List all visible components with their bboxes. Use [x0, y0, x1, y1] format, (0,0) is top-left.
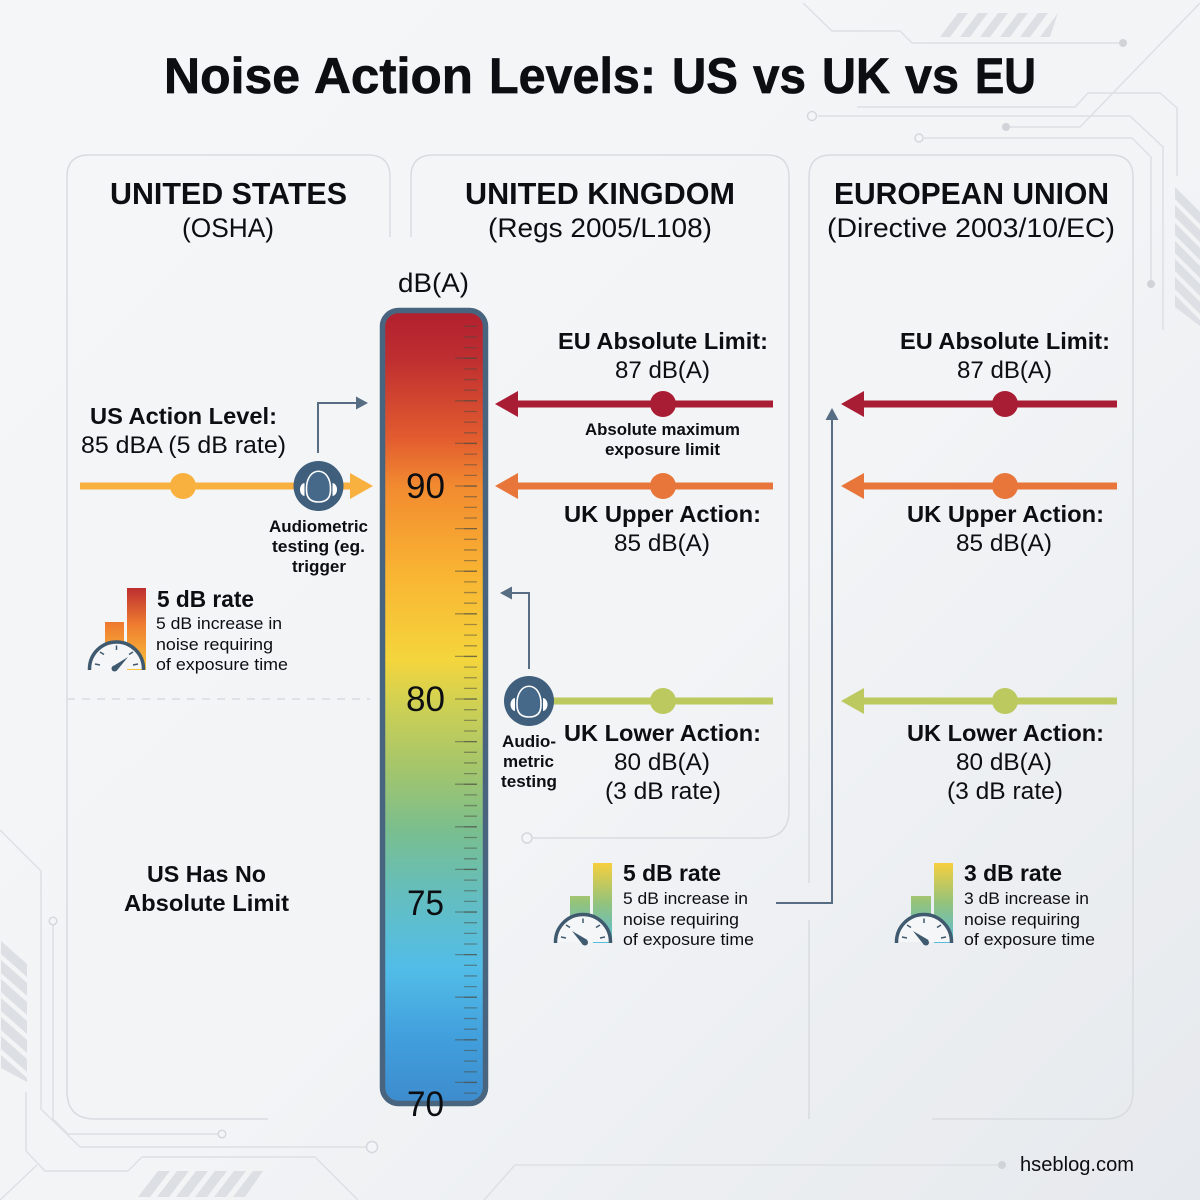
UK rate text: 5 dB rate — [623, 860, 721, 886]
heading: United Kingdom: UNITED KINGDOM — [465, 176, 735, 211]
EU upper action label — [907, 501, 1104, 557]
arrow: UK column absolute limit — [495, 391, 773, 417]
scale unit label: dB(A) — [398, 268, 469, 298]
panel: European Union — [809, 155, 1133, 1119]
title: Action — [314, 48, 473, 104]
icon: UK audiometric headphones — [504, 676, 554, 726]
heading: United States: (OSHA) — [182, 213, 274, 243]
UK upper action label: UK Upper Action: — [564, 501, 761, 527]
scale value 90: 90 — [406, 467, 445, 506]
title: Levels: — [489, 48, 656, 104]
UK rate text: of exposure time — [623, 930, 754, 949]
EU rate text — [964, 860, 1095, 949]
US action level label: 85 dBA (5 dB rate) — [81, 432, 286, 459]
title: US — [672, 48, 738, 104]
arrow: UK lower action — [545, 688, 773, 714]
US rate text: noise requiring — [156, 635, 273, 654]
icon: UK rate bars and gauge — [556, 863, 612, 946]
EU lower action label — [907, 720, 1104, 805]
scale value 80: 80 — [406, 680, 445, 719]
panel: United States — [67, 155, 390, 1119]
EU absolute limit label: 87 dB(A) — [957, 357, 1052, 384]
EU rate text: 3 dB rate — [964, 860, 1062, 886]
UK rate text — [623, 860, 754, 949]
UK audiometric note: testing — [501, 773, 557, 791]
US rate text: 5 dB increase in — [156, 614, 282, 633]
arrow: UK upper action — [495, 473, 773, 499]
heading: United Kingdom: (Regs 2005/L108) — [488, 213, 712, 243]
arrow: US audiometric connector — [318, 396, 368, 453]
icon: EU rate bars and gauge — [896, 863, 953, 946]
US rate text: of exposure time — [156, 655, 288, 674]
US audiometric note: trigger — [292, 558, 347, 576]
EU upper action label: UK Upper Action: — [907, 501, 1104, 527]
icon: US rate bars and gauge — [90, 588, 146, 672]
title: EU — [975, 48, 1036, 104]
arrow: EU upper action — [841, 473, 1117, 499]
heading: European Union — [827, 176, 1115, 243]
EU lower action label: UK Lower Action: — [907, 720, 1104, 746]
UK rate text: 5 dB increase in — [623, 889, 748, 908]
UK lower action label — [564, 720, 761, 805]
US rate text — [156, 586, 288, 674]
panel: United Kingdom — [411, 155, 789, 843]
US audiometric note: Audiometric — [269, 518, 368, 536]
UK upper action label — [564, 501, 761, 557]
EU rate text: noise requiring — [964, 910, 1080, 929]
US action level label: US Action Level: — [90, 403, 277, 429]
absolute limit note: exposure limit — [605, 440, 720, 459]
UK audiometric note: metric — [503, 753, 554, 771]
heading: European Union: EUROPEAN UNION — [834, 176, 1109, 211]
UK lower action label: 80 dB(A) — [614, 749, 710, 776]
US audiometric note — [269, 518, 368, 576]
scale ticks — [466, 326, 470, 1094]
EU lower action label: (3 dB rate) — [947, 778, 1063, 805]
title: vs — [905, 48, 959, 104]
EU rate text: of exposure time — [964, 930, 1095, 949]
arrow: US action level — [80, 473, 373, 499]
absolute limit note — [585, 420, 740, 459]
title: vs — [753, 48, 806, 104]
title: UK — [822, 48, 890, 104]
EU upper action label: 85 dB(A) — [956, 530, 1052, 557]
UK rate text: noise requiring — [623, 910, 739, 929]
UK upper action label: 85 dB(A) — [614, 530, 710, 557]
source credit: hseblog.com — [1020, 1154, 1134, 1176]
heading: United Kingdom — [465, 176, 735, 243]
UK lower action label: (3 dB rate) — [605, 778, 721, 805]
US no absolute limit note: US Has No — [147, 861, 266, 887]
EU lower action label: 80 dB(A) — [956, 749, 1052, 776]
UK column EU absolute limit label: 87 dB(A) — [615, 357, 710, 384]
UK lower action label: UK Lower Action: — [564, 720, 761, 746]
US audiometric note: testing (eg. — [272, 538, 365, 556]
US rate text: 5 dB rate — [157, 586, 254, 612]
UK column EU absolute limit label: EU Absolute Limit: — [558, 328, 768, 354]
UK column EU absolute limit label — [558, 328, 768, 384]
US no absolute limit note: Absolute Limit — [124, 890, 289, 916]
arrow: EU lower action — [841, 688, 1117, 714]
title: Noise — [164, 48, 300, 104]
arrow: UK rate connector — [776, 408, 838, 903]
scale value 75: 75 — [407, 884, 444, 923]
heading: European Union: (Directive 2003/10/EC) — [827, 213, 1115, 243]
US no absolute limit note — [124, 861, 289, 916]
arrow: UK audiometric connector — [500, 586, 529, 669]
title — [164, 48, 1036, 104]
EU absolute limit label: EU Absolute Limit: — [900, 328, 1110, 354]
chart: decibel scale bar — [382, 310, 486, 1124]
arrow: EU absolute limit — [841, 391, 1117, 417]
UK audiometric note: Audio- — [502, 733, 556, 751]
US action level label — [81, 403, 286, 459]
UK audiometric note — [501, 733, 557, 791]
EU absolute limit label — [900, 328, 1110, 384]
EU rate text: 3 dB increase in — [964, 889, 1089, 908]
heading: United States — [110, 176, 347, 243]
heading: United States: UNITED STATES — [110, 176, 347, 211]
absolute limit note: Absolute maximum — [585, 420, 740, 439]
icon: US audiometric headphones — [294, 461, 344, 511]
scale value 70: 70 — [407, 1085, 444, 1124]
